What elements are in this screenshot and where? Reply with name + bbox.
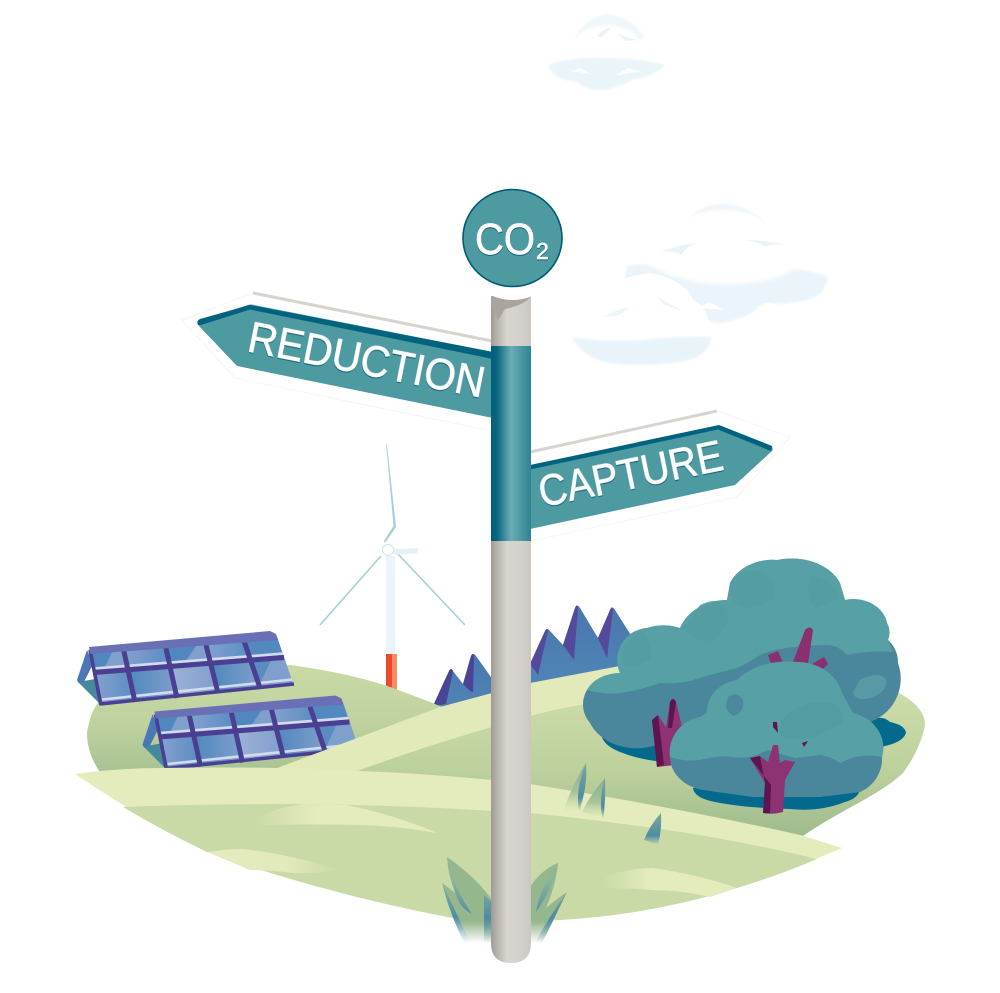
reduction label: REDUCTION — [244, 313, 489, 407]
capture sign board — [530, 426, 773, 529]
turbine tower — [386, 556, 395, 656]
capture label: CAPTURE — [534, 431, 727, 517]
branches: back tree — [768, 628, 828, 670]
wind turbine — [320, 443, 465, 694]
signpost pole — [491, 296, 531, 963]
turbine blades — [320, 443, 465, 625]
solar panel: back — [77, 631, 294, 705]
CO2 label: CO — [475, 215, 535, 264]
sign: reduction — [182, 293, 493, 431]
solar panel: front — [142, 696, 360, 770]
pole upper gray — [491, 296, 531, 352]
reduction sign board — [198, 304, 493, 418]
cloud: top — [548, 14, 665, 90]
tree crown: back lower — [583, 559, 901, 748]
tree shadow: back right — [860, 718, 906, 748]
reduction sign dark edge — [197, 305, 493, 359]
grass: bottom of pole — [442, 857, 567, 943]
capture sign top edge — [530, 411, 717, 452]
tree crown: front upper — [670, 662, 883, 763]
grass tufts: mid field — [563, 763, 661, 845]
grass highlight streaks — [207, 804, 737, 897]
disc — [463, 190, 562, 286]
capture sign halo — [530, 411, 790, 541]
disc halo — [458, 186, 566, 300]
trunk: back left — [652, 699, 682, 767]
hill: centre light green — [277, 665, 680, 785]
tree crown: back upper — [587, 559, 893, 694]
pole lower gray — [491, 536, 531, 963]
reduction sign top edge — [253, 293, 492, 341]
CO2 label: 2 — [536, 238, 549, 264]
hill: back left — [87, 665, 445, 775]
cloud: right back — [625, 204, 828, 323]
pole teal band — [491, 346, 531, 541]
hill: front mid green — [123, 804, 817, 921]
CO2 disc — [458, 186, 566, 300]
capture sign dark edge — [530, 425, 772, 470]
tree shadow: back left — [601, 725, 700, 762]
cloud: right front — [572, 273, 712, 365]
tree: back — [583, 559, 906, 762]
tree: front — [670, 662, 883, 814]
trunk: front — [750, 745, 795, 814]
mountains left of pole — [433, 654, 493, 712]
hill: front light green — [75, 768, 842, 921]
tree crown: front lower — [670, 662, 883, 797]
pole cap shading — [491, 296, 531, 320]
hill: right mid-green — [320, 640, 925, 838]
sign: capture — [530, 411, 790, 541]
turbine red base — [386, 654, 397, 694]
mountains right of pole — [530, 606, 634, 690]
mountains — [433, 606, 634, 712]
tree shadow: front — [693, 785, 860, 810]
reduction sign halo — [182, 293, 492, 431]
